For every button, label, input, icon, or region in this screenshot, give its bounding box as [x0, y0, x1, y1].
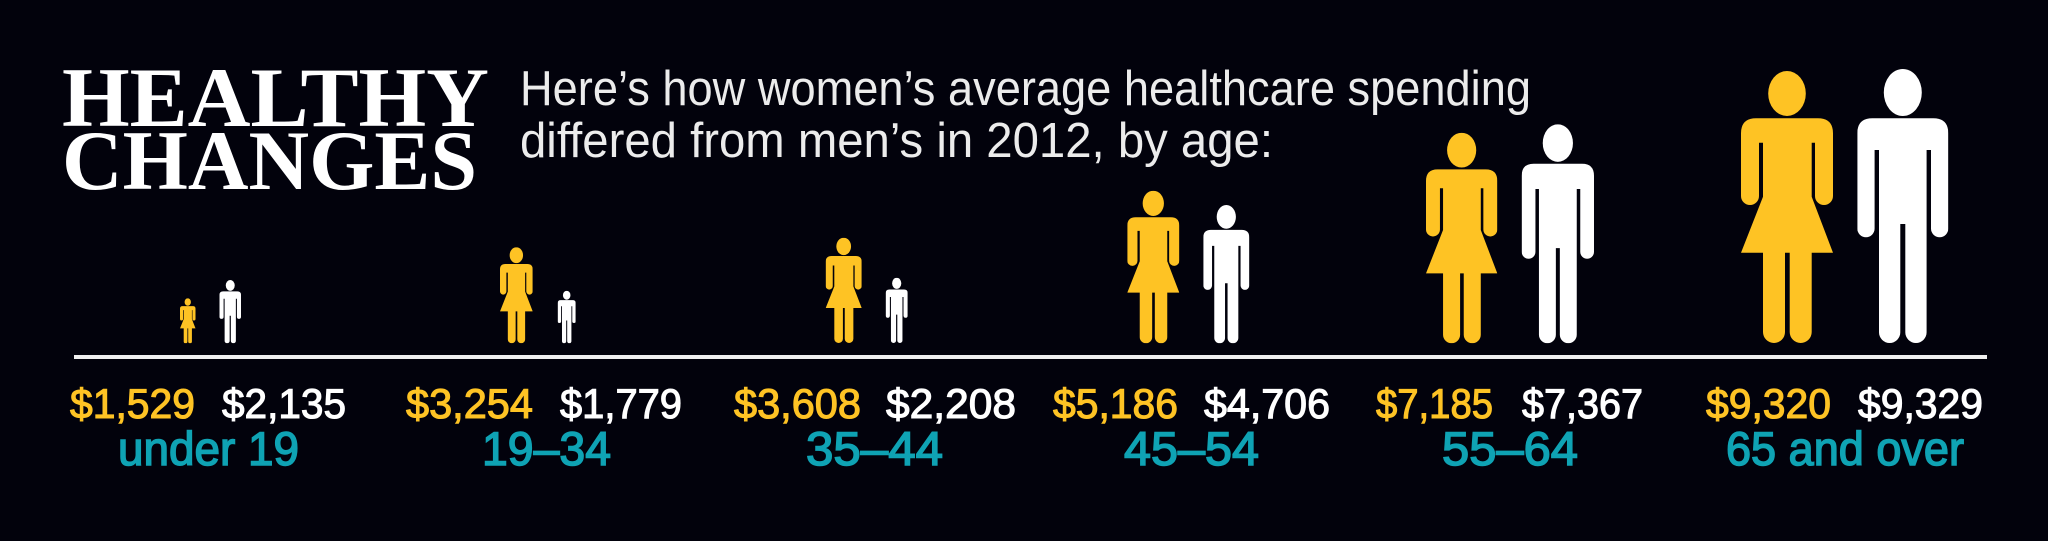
- icon: man 35–44: [886, 278, 908, 343]
- icon: man 65 and over: [1857, 69, 1948, 343]
- icon: woman 45–54: [1127, 191, 1179, 343]
- panel: 45–54: [1053, 191, 1330, 475]
- icon: man 19–34: [558, 291, 576, 343]
- age label under 19: under 19: [118, 422, 299, 475]
- age label 19–34: 19–34: [482, 422, 611, 475]
- subtitle text: [520, 62, 1531, 168]
- women's spending 55–64: $7,185: [1376, 380, 1493, 427]
- men's spending 35–44: $2,208: [886, 380, 1016, 427]
- title: HEALTHY: [62, 51, 489, 145]
- panel: 55–64: [1376, 124, 1643, 475]
- women's spending 35–44: $3,608: [734, 380, 861, 427]
- women's spending 19–34: $3,254: [406, 380, 533, 427]
- men's spending 55–64: $7,367: [1522, 380, 1643, 427]
- icon: woman under 19: [180, 298, 196, 343]
- icon: woman 55–64: [1426, 133, 1497, 343]
- men's spending 65 and over: $9,329: [1858, 380, 1983, 427]
- panel: 65 and over: [1706, 69, 1983, 475]
- icon: man 55–64: [1522, 124, 1594, 343]
- subtitle text: differed from men’s in 2012, by age:: [520, 114, 1273, 168]
- title: [62, 51, 489, 208]
- women's spending 45–54: $5,186: [1053, 380, 1178, 427]
- men's spending under 19: $2,135: [222, 380, 346, 427]
- baseline rule: [74, 355, 1987, 359]
- icon: man under 19: [220, 280, 241, 343]
- panel: 19–34: [406, 247, 682, 475]
- age label 35–44: 35–44: [806, 422, 943, 475]
- age label 55–64: 55–64: [1442, 422, 1578, 475]
- icon: woman 65 and over: [1741, 71, 1833, 343]
- age label 45–54: 45–54: [1124, 422, 1259, 475]
- title: CHANGES: [62, 114, 477, 208]
- icon: woman 19–34: [500, 247, 533, 343]
- women's spending under 19: $1,529: [70, 380, 195, 427]
- men's spending 45–54: $4,706: [1204, 380, 1330, 427]
- panel: 35–44: [734, 238, 1016, 475]
- icon: man 45–54: [1203, 205, 1249, 343]
- women's spending 65 and over: $9,320: [1706, 380, 1831, 427]
- men's spending 19–34: $1,779: [560, 380, 682, 427]
- age label 65 and over: 65 and over: [1726, 422, 1964, 475]
- icon: woman 35–44: [826, 238, 862, 343]
- panel: under 19: [70, 280, 346, 475]
- subtitle text: Here’s how women’s average healthcare spending: [520, 62, 1531, 116]
